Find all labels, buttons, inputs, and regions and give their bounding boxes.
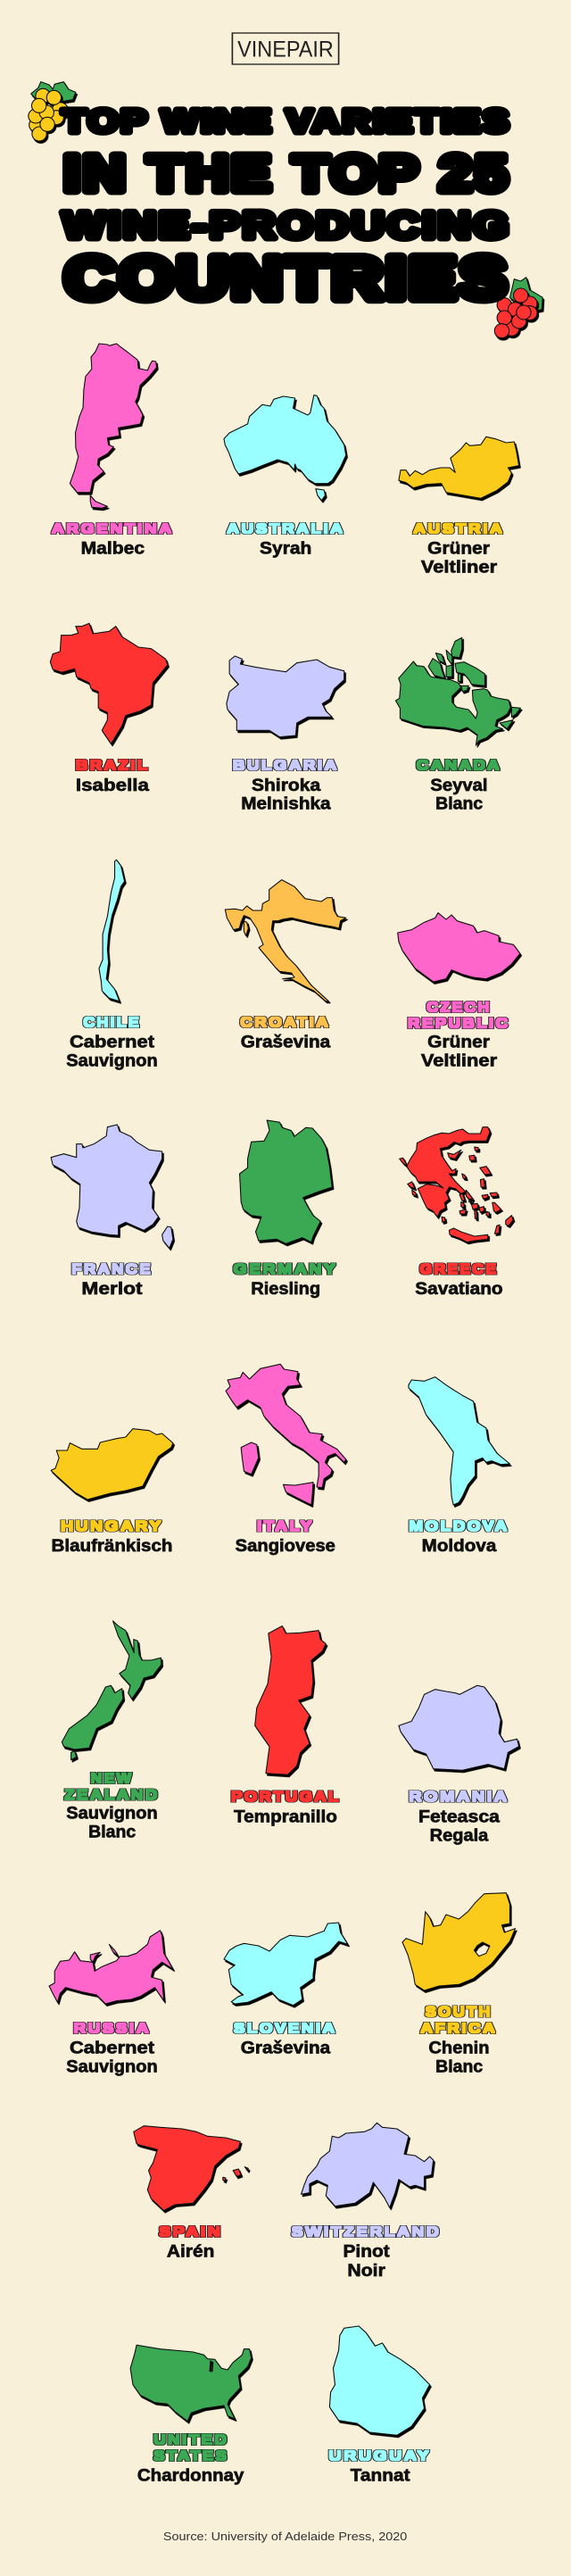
logo: VinePair — [232, 33, 339, 64]
panel: New Zealand: NEW — [91, 1770, 133, 1786]
panel: Moldova — [409, 1377, 509, 1555]
logo: VinePair: VINEPAIR — [237, 37, 334, 62]
panel: Czech Republic: Grüner — [427, 1033, 490, 1051]
icon: yellow grapes — [29, 82, 76, 141]
panel: Austria: Grüner — [427, 540, 490, 558]
panel: Russia — [49, 1931, 173, 2076]
panel: Switzerland: SWITZERLAND — [292, 2223, 441, 2239]
panel: Chile: Cabernet — [70, 1033, 154, 1051]
row 7 — [49, 1893, 516, 2076]
row 2 — [50, 623, 520, 813]
panel: Hungary: Blaufränkisch — [52, 1537, 172, 1555]
panel: Russia: Sauvignon — [66, 2058, 158, 2076]
panel: Spain: SPAIN — [159, 2223, 222, 2239]
panel: Romania: Regala — [430, 1827, 489, 1845]
panel: Croatia: CROATIA — [240, 1014, 330, 1030]
panel: Czech Republic: CZECH — [426, 999, 492, 1015]
panel: New Zealand: Sauvignon — [66, 1805, 158, 1823]
rows 8 and 9 — [130, 2123, 441, 2543]
panel: Portugal: PORTUGAL — [231, 1789, 341, 1805]
panel: Hungary — [51, 1429, 173, 1555]
panel: United States: STATES — [153, 2447, 228, 2464]
panel: Australia: AUSTRALIA — [227, 520, 345, 536]
panel: Brazil — [50, 623, 168, 794]
panel: France — [51, 1125, 173, 1298]
icon: red grapes — [494, 278, 542, 338]
header — [29, 33, 542, 338]
title: IN THE TOP 25 — [63, 145, 510, 202]
panel: Uruguay: Tannat — [351, 2467, 410, 2485]
panel: Moldova: MOLDOVA — [409, 1518, 509, 1534]
panel: Canada: Seyval — [430, 777, 488, 794]
panel: Romania: Feteasca — [418, 1807, 500, 1826]
row 4 — [51, 1120, 513, 1298]
panel: Italy: Sangiovese — [236, 1537, 335, 1555]
panel: Uruguay — [329, 2326, 431, 2485]
panel: Romania: ROMANIA — [409, 1789, 509, 1805]
source note: Source: University of Adelaide Press, 2020 — [163, 2530, 407, 2543]
title: WINE-PRODUCING — [62, 204, 511, 246]
panel: South Africa — [402, 1893, 516, 2076]
title: TOP WINE VARIETIES — [62, 103, 511, 139]
row 1 — [52, 344, 519, 577]
panel: United States: Chardonnay — [137, 2467, 244, 2485]
panel: Argentina: ARGENTINA — [52, 520, 174, 536]
panel: New Zealand: ZEALAND — [64, 1787, 160, 1803]
panel: South Africa: SOUTH — [426, 2004, 492, 2020]
panel: Canada: Blanc — [435, 795, 483, 813]
panel: Bulgaria — [227, 656, 344, 813]
panel: Switzerland — [292, 2123, 441, 2280]
panel: Uruguay: URUGUAY — [329, 2447, 431, 2464]
panel: Croatia — [225, 880, 346, 1051]
panel: United States — [130, 2345, 252, 2485]
panel: Portugal: Tempranillo — [234, 1807, 337, 1826]
panel: Chile: CHILE — [83, 1014, 141, 1030]
panel: Portugal — [231, 1626, 341, 1826]
panel: Czech Republic: Veltliner — [421, 1051, 497, 1070]
panel: Brazil: Isabella — [76, 777, 149, 794]
panel: Germany: GERMANY — [234, 1261, 337, 1277]
panel: Russia: Cabernet — [70, 2039, 154, 2057]
panel: South Africa: Blanc — [435, 2058, 483, 2076]
title — [62, 103, 511, 311]
panel: Australia: Syrah — [260, 540, 311, 558]
row 5 — [51, 1364, 509, 1555]
row 6 — [62, 1621, 519, 1845]
panel: France: FRANCE — [71, 1261, 153, 1277]
panel: Canada: CANADA — [417, 757, 501, 773]
panel: Bulgaria: Melnishka — [241, 795, 331, 813]
panel: Greece: Savatiano — [415, 1280, 503, 1298]
panel: Italy — [226, 1364, 346, 1555]
panel: Slovenia: Graševina — [241, 2039, 330, 2057]
panel: Italy: ITALY — [257, 1518, 314, 1534]
panel: Argentina — [52, 344, 174, 558]
panel: Czech Republic: REPUBLIC — [408, 1015, 509, 1031]
panel: Argentina: Malbec — [81, 540, 145, 558]
panel: Russia: RUSSIA — [73, 2020, 151, 2036]
panel: Greece — [400, 1127, 513, 1298]
panel: France: Merlot — [81, 1280, 143, 1298]
panel: Austria: AUSTRIA — [413, 520, 504, 536]
row 3 — [66, 860, 520, 1070]
panel: Switzerland: Noir — [347, 2262, 385, 2280]
panel: Bulgaria: Shiroka — [252, 777, 320, 794]
panel: Spain — [134, 2126, 248, 2261]
panel: South Africa: AFRICA — [420, 2020, 497, 2036]
panel: Canada — [395, 637, 520, 813]
panel: New Zealand — [62, 1621, 161, 1841]
panel: Spain: Airén — [167, 2243, 214, 2261]
panel: Chile — [66, 860, 158, 1070]
panel: New Zealand: Blanc — [88, 1823, 136, 1841]
panel: Austria: Veltliner — [421, 559, 497, 577]
panel: Romania — [399, 1685, 519, 1845]
panel: Australia — [224, 395, 346, 558]
panel: Greece: GREECE — [420, 1261, 498, 1277]
title: COUNTRIES — [65, 245, 509, 311]
panel: Switzerland: Pinot — [343, 2243, 390, 2261]
panel: Germany: Riesling — [251, 1280, 320, 1298]
panel: Slovenia — [224, 1923, 348, 2057]
panel: Czech Republic — [398, 913, 520, 1070]
panel: Hungary: HUNGARY — [61, 1518, 163, 1534]
panel: South Africa: Chenin — [428, 2039, 490, 2057]
panel: Chile: Sauvignon — [66, 1051, 158, 1070]
panel: Moldova: Moldova — [422, 1537, 497, 1555]
panel: Slovenia: SLOVENIA — [234, 2020, 337, 2036]
panel: Brazil: BRAZIL — [76, 757, 150, 773]
panel: Germany — [234, 1120, 337, 1298]
panel: Croatia: Graševina — [241, 1033, 330, 1051]
panel: Austria — [399, 436, 519, 577]
panel: United States: UNITED — [153, 2431, 228, 2447]
panel: Bulgaria: BULGARIA — [233, 757, 339, 773]
